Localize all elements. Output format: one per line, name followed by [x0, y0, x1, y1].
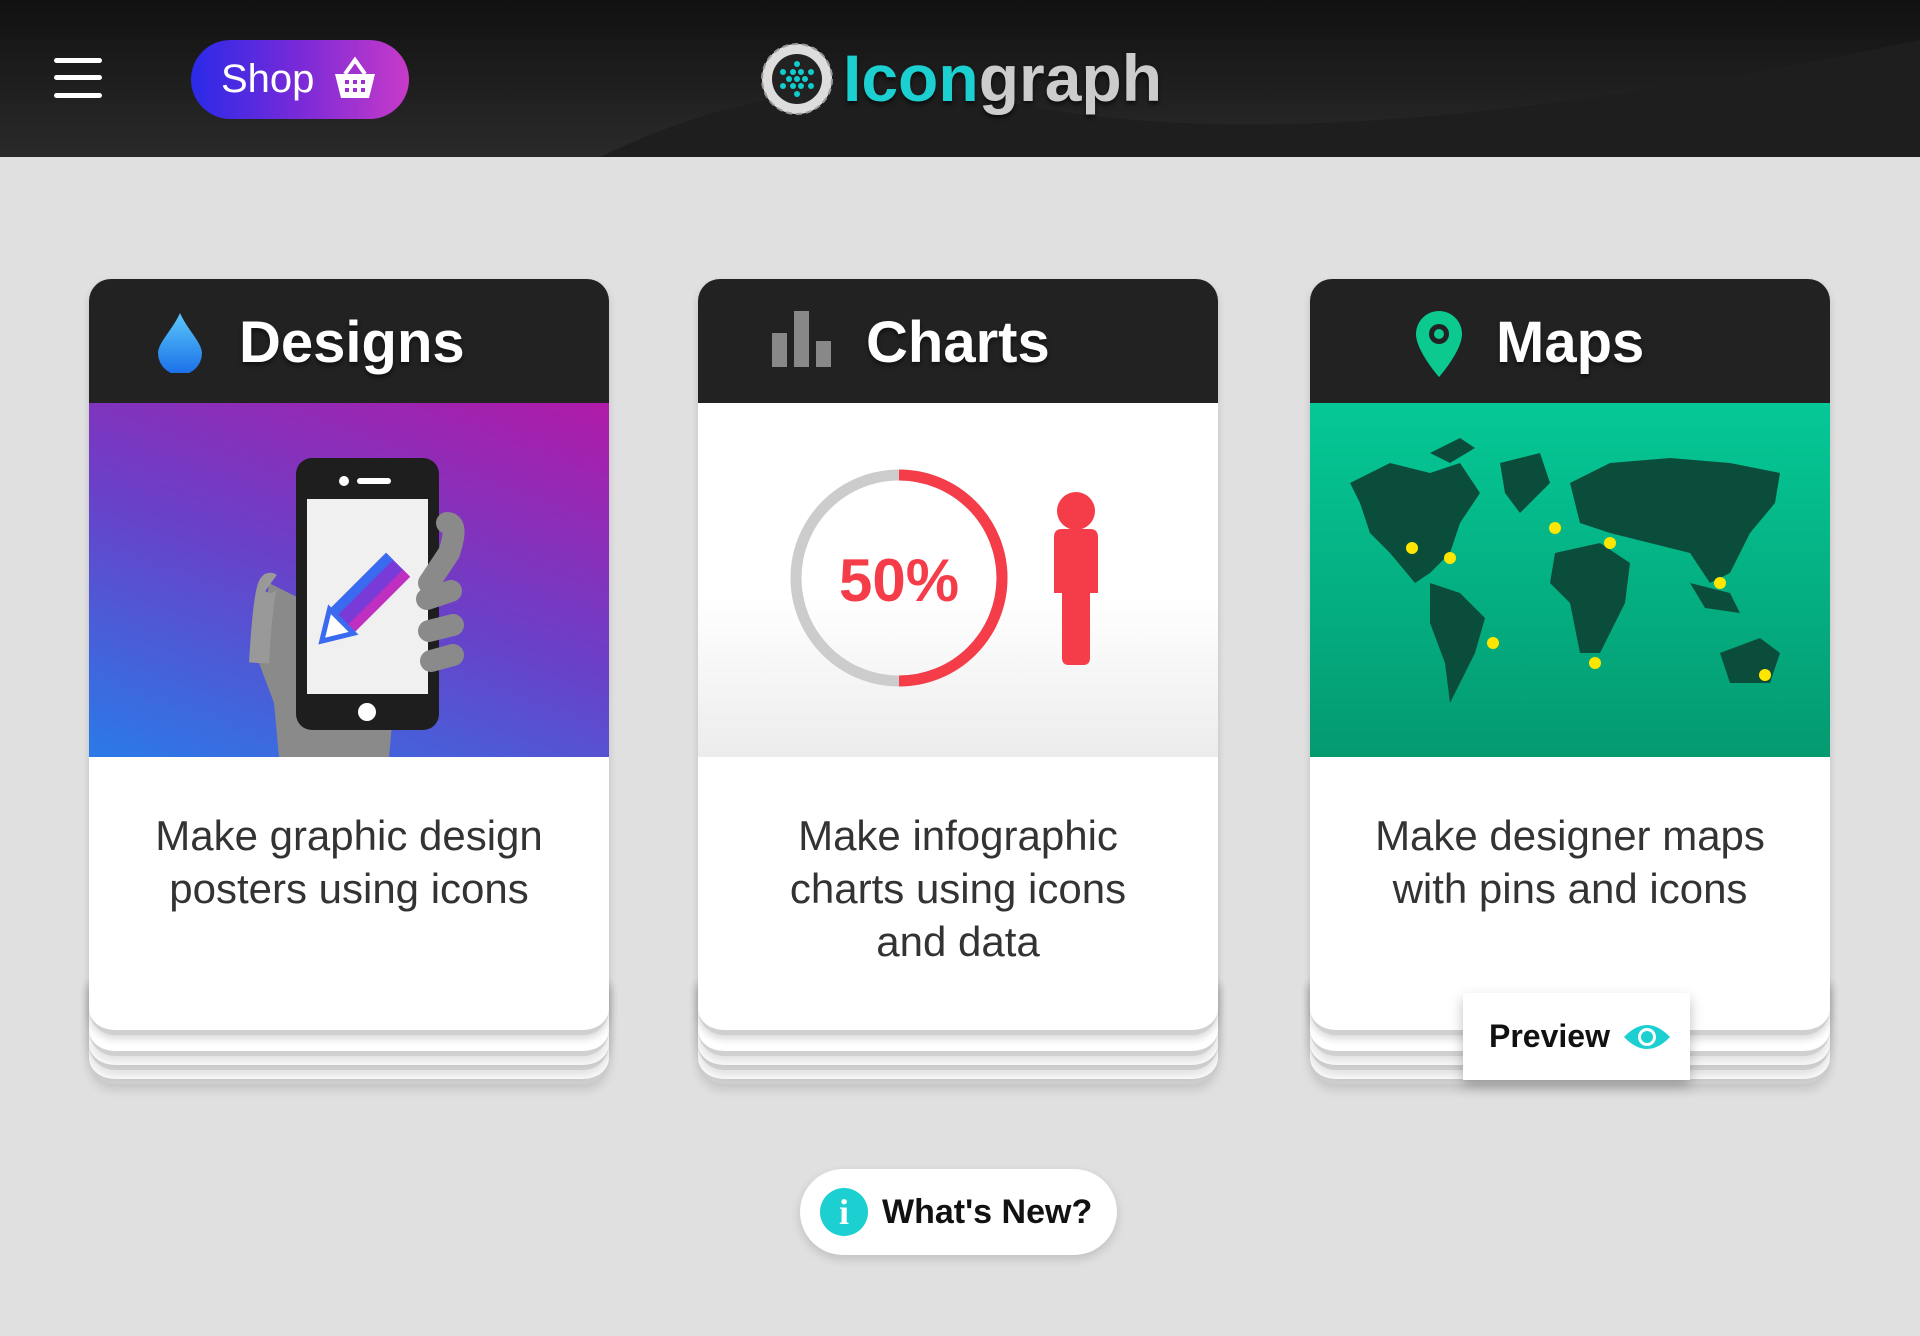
- illustration: phone in hand: [89, 403, 609, 757]
- button: what's new: [800, 1169, 1117, 1255]
- text: charts description: Make infographic: [798, 812, 1118, 859]
- text: designs description: posters using icons: [169, 865, 529, 912]
- panel: designs: [82, 279, 616, 1092]
- chart: donut 50% and person: [698, 403, 1218, 757]
- panel: maps: [1304, 279, 1836, 1092]
- menu icon: [54, 58, 102, 98]
- heading: designs: [89, 279, 609, 403]
- map: world with pins: [1310, 403, 1830, 757]
- icon: info: i: [839, 1192, 849, 1232]
- text: maps description: Make designer maps: [1375, 812, 1765, 859]
- icon: info: [820, 1188, 868, 1236]
- logo: Icongraph: [843, 41, 1162, 115]
- text: charts description: charts using icons: [790, 865, 1126, 912]
- button: preview: [1463, 993, 1690, 1080]
- text: charts description: [790, 812, 1126, 965]
- panel: charts: [692, 279, 1224, 1092]
- text: designs description: [155, 812, 543, 912]
- icon: water drop: [158, 313, 202, 373]
- shop button: [191, 40, 409, 119]
- icon: basket: [335, 56, 375, 98]
- heading: charts: Charts: [866, 310, 1050, 375]
- header bar: [0, 0, 1920, 157]
- text: designs description: Make graphic design: [155, 812, 543, 859]
- heading: maps: Maps: [1496, 310, 1644, 375]
- shop button: Shop: [221, 57, 314, 101]
- heading: charts: [698, 279, 1218, 403]
- icon: eye: [1624, 1025, 1670, 1049]
- icon: sunflower: [761, 43, 833, 115]
- button: preview: Preview: [1489, 1018, 1610, 1054]
- heading: maps: [1310, 279, 1830, 403]
- text: maps description: [1375, 812, 1765, 912]
- chart: donut 50% and person: 50%: [839, 547, 959, 614]
- icon: bar chart: [772, 311, 831, 367]
- text: maps description: with pins and icons: [1393, 865, 1747, 912]
- button: what's new: What's New?: [882, 1193, 1092, 1231]
- icon: map pin: [1416, 311, 1462, 377]
- heading: designs: Designs: [239, 310, 465, 375]
- text: charts description: and data: [876, 918, 1040, 965]
